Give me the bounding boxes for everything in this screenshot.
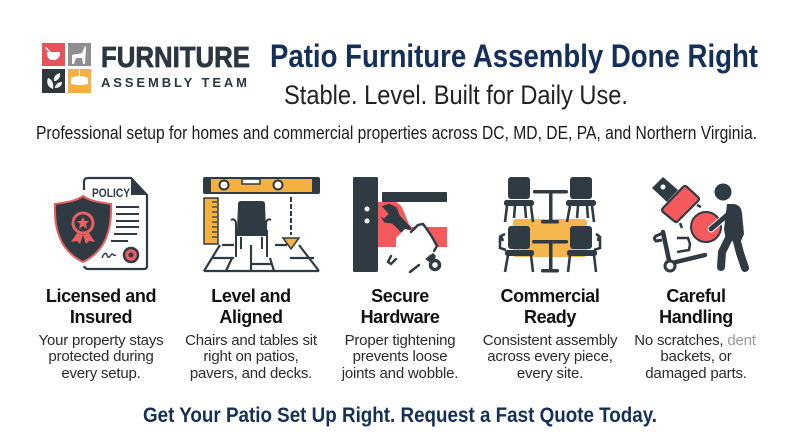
logo mark bbox=[42, 43, 91, 93]
description: Proper tightening bbox=[345, 332, 455, 349]
description: Your property stays bbox=[39, 332, 163, 349]
call to action: Get Your Patio Set Up Right. Request a Fast Quote Today. bbox=[143, 404, 657, 427]
heading: Secure bbox=[371, 286, 429, 306]
heading: Licensed and bbox=[46, 286, 156, 306]
description: Consistent assembly bbox=[483, 332, 618, 349]
icon: level, chair and floor bbox=[204, 178, 319, 271]
logo wordmark: FURNITURE bbox=[101, 42, 250, 74]
panel: level and aligned bbox=[185, 178, 319, 382]
description: right on patios, bbox=[203, 348, 299, 365]
icon: policy and shield: POLICY bbox=[92, 186, 130, 200]
description: No scratches, dent bbox=[634, 332, 756, 349]
subtitle: Stable. Level. Built for Daily Use. bbox=[284, 80, 628, 110]
description: every site. bbox=[517, 365, 583, 382]
heading: Handling bbox=[659, 307, 733, 327]
heading: Careful bbox=[666, 286, 726, 306]
description: across every piece, bbox=[487, 348, 613, 365]
description: backets, or bbox=[660, 348, 732, 365]
description: prevents loose bbox=[353, 348, 447, 365]
logo bbox=[42, 42, 250, 93]
heading: Ready bbox=[524, 307, 576, 327]
heading: Hardware bbox=[361, 307, 440, 327]
description: joints and wobble. bbox=[341, 365, 458, 382]
heading: Level and bbox=[211, 286, 291, 306]
panel: licensed and insured bbox=[39, 178, 163, 382]
heading: Insured bbox=[70, 307, 132, 327]
icon: wrench and hand bbox=[353, 177, 447, 274]
panel: secure hardware bbox=[341, 177, 458, 382]
icon: person moving items bbox=[652, 177, 745, 271]
panel: careful handling bbox=[634, 177, 757, 382]
heading: Aligned bbox=[219, 307, 283, 327]
description: protected during bbox=[48, 348, 154, 365]
description: pavers, and decks. bbox=[190, 365, 312, 382]
heading: Commercial bbox=[500, 286, 600, 306]
logo tagline: ASSEMBLY TEAM bbox=[101, 75, 247, 90]
description: every setup. bbox=[61, 365, 141, 382]
icon: policy and shield bbox=[55, 178, 147, 269]
panel: commercial ready bbox=[483, 177, 618, 382]
description: damaged parts. bbox=[645, 365, 747, 382]
description: Chairs and tables sit bbox=[185, 332, 318, 349]
icon: tables and chairs bbox=[500, 177, 600, 272]
